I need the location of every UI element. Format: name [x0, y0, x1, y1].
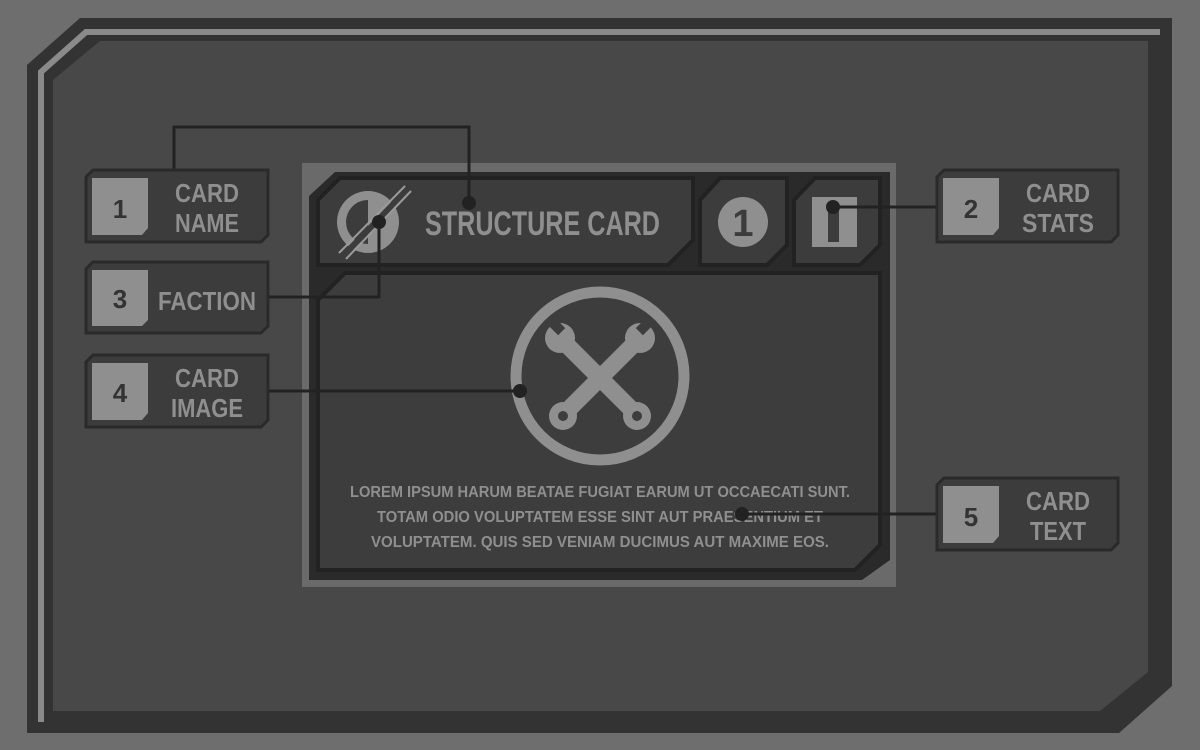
label 5: card text: 5: [964, 502, 978, 532]
card text: [350, 484, 850, 551]
card text: VOLUPTATEM. QUIS SED VENIAM DUCIMUS AUT MAXIME EOS.: [371, 534, 829, 551]
stat box 1: [700, 178, 787, 265]
card text: TOTAM ODIO VOLUPTATEM ESSE SINT AUT PRAESENTIUM ET: [377, 509, 823, 526]
label 1: card name: [86, 170, 268, 242]
label 5: card text: CARD: [1026, 486, 1090, 516]
card text: LOREM IPSUM HARUM BEATAE FUGIAT EARUM UT OCCAECATI SUNT.: [350, 484, 850, 501]
label 1: card name: NAME: [175, 208, 239, 238]
label 2: card stats: STATS: [1022, 208, 1094, 238]
icon: faction: [337, 186, 411, 259]
label 2: card stats: CARD: [1026, 178, 1090, 208]
label 2: card stats: 2: [964, 194, 978, 224]
label 5: card text: [937, 478, 1118, 550]
body box: [318, 273, 880, 570]
label 1: card name: 1: [113, 194, 127, 224]
label 4: card image: 4: [113, 378, 128, 408]
card title: STRUCTURE CARD: [425, 205, 660, 243]
card panel: [302, 163, 896, 587]
label 2: card stats: [937, 170, 1118, 242]
stat box 1: 1: [732, 203, 754, 245]
label 3: faction: 3: [113, 284, 127, 314]
connector dots: [372, 196, 840, 521]
label 1: card name: CARD: [175, 178, 239, 208]
icon: wrenches: [516, 292, 684, 460]
name box: [318, 178, 693, 265]
label 4: card image: [86, 355, 268, 427]
label 4: card image: CARD: [175, 363, 239, 393]
label 5: card text: TEXT: [1030, 516, 1086, 546]
label 3: faction: [86, 262, 268, 333]
label 3: faction: FACTION: [158, 286, 256, 316]
stat box 2: [794, 178, 880, 265]
label 4: card image: IMAGE: [171, 393, 243, 423]
connector lines: [174, 127, 937, 514]
